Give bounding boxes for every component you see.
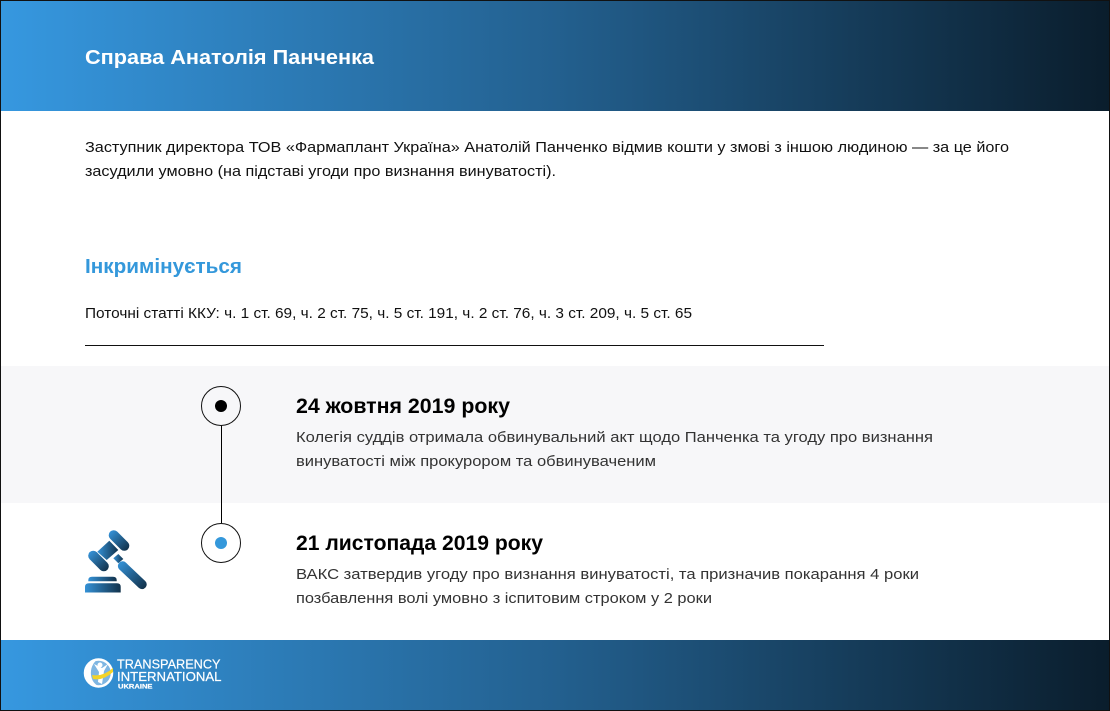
logo wordmark: TRANSPARENCY <box>117 658 221 672</box>
logo wordmark: UKRAINE <box>118 684 153 690</box>
intro text: Заступник директора ТОВ «Фармаплант Україна» Анатолій Панченко відмив кошти у змові з іншою людиною — за це його <box>85 139 1009 156</box>
event 2 description: позбавлення волі умовно з іспитовим строком у 2 роки <box>296 590 712 607</box>
timeline <box>202 386 240 562</box>
footer band <box>0 640 1110 711</box>
panel: timeline event 1 background <box>0 366 1110 503</box>
heading: incriminated: Інкримінується <box>85 256 242 278</box>
logo emblem <box>85 660 113 687</box>
event 1 description <box>296 429 933 470</box>
title: Справа Анатолія Панченка <box>85 47 375 69</box>
event 2 date: 21 листопада 2019 року <box>296 532 543 555</box>
intro text: засудили умовно (на підставі угоди про визнання винуватості). <box>85 163 556 180</box>
event 1 description: Колегія суддів отримала обвинувальний акт щодо Панченка та угоду про визнання <box>296 429 933 446</box>
event 2 description: ВАКС затвердив угоду про визнання винуватості, та призначив покарання 4 роки <box>296 566 919 583</box>
event 1 date: 24 жовтня 2019 року <box>296 395 510 418</box>
icon: gavel <box>85 528 149 592</box>
header band <box>0 0 1110 111</box>
timeline marker 1 <box>202 386 240 426</box>
logo wordmark <box>117 658 222 690</box>
event 1 <box>296 395 933 470</box>
intro text <box>85 139 1009 180</box>
timeline marker 2 <box>202 524 240 562</box>
articles text: Поточні статті ККУ: ч. 1 ст. 69, ч. 2 ст. 75, ч. 5 ст. 191, ч. 2 ст. 76, ч. 3 ст. 209, ч. 5 ст. 65 <box>85 305 692 322</box>
event 2 description <box>296 566 919 607</box>
logo wordmark: INTERNATIONAL <box>117 670 222 684</box>
event 2 <box>296 532 919 607</box>
event 1 description: винуватості між прокурором та обвинуваченим <box>296 453 656 470</box>
logo: Transparency International Ukraine <box>85 658 222 690</box>
